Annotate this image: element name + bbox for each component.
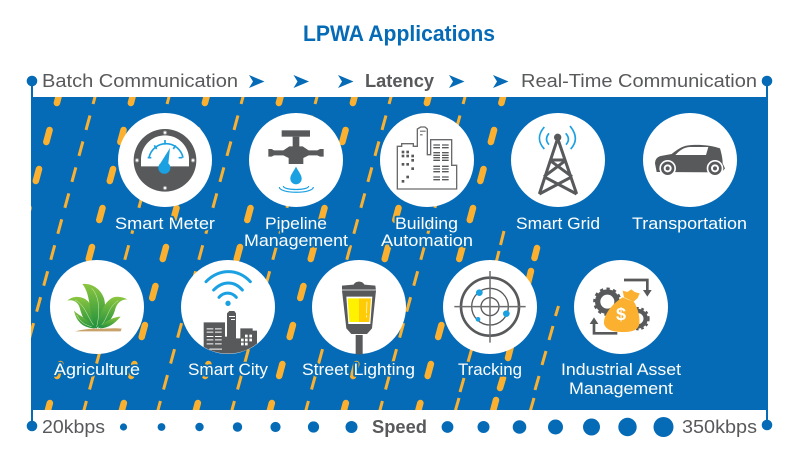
icon circle: transportation [643,113,737,207]
label: transportation: Transportation [632,215,747,233]
latency label: Latency [365,71,434,91]
label: building automation [381,215,473,250]
icon: wifi and city [204,272,257,357]
application: transportation [632,113,747,233]
label: industrial asset management: Management [569,380,673,398]
350kbps label: 350kbps [682,416,757,437]
label: pipeline management: Management [244,232,348,250]
label: smart grid: Smart Grid [516,215,600,233]
axis end dot [762,76,772,86]
application: building automation [380,113,474,250]
latency axis [27,70,772,91]
panel: applications background [31,97,768,410]
icon circle: tracking [443,260,537,354]
label: building automation: Building [395,215,458,233]
dashed rain pattern [31,97,560,410]
icon circle: smart meter [118,113,212,207]
arrows [249,75,508,88]
speed dots [120,417,673,437]
icon circle: pipeline [249,113,343,207]
icon: pipe and drop [268,130,324,192]
label: industrial asset management: Industrial Asset [561,361,681,379]
application: smart grid [511,113,605,233]
label: building automation: Automation [381,232,473,250]
icon: target [454,271,526,343]
application: smart city [181,260,275,379]
speed label: Speed [372,417,427,437]
real-time communication label: Real-Time Communication [521,70,757,91]
application: industrial asset management [561,260,681,398]
icon circle: agriculture [50,260,144,354]
axis start dot [27,421,37,431]
application: pipeline management [244,113,348,250]
icon: car [655,145,725,177]
application: smart meter [115,113,216,233]
label: pipeline management [244,215,348,250]
icon circle: smart grid [511,113,605,207]
icon: plant [67,284,127,331]
label: tracking: Tracking [458,361,522,379]
icon circle: smart city [181,260,275,354]
application: agriculture [50,260,144,379]
icon: tower [539,126,577,194]
batch communication label: Batch Communication [42,70,238,91]
icon circle: street lighting [312,260,406,354]
application: street lighting [302,260,415,379]
speed axis [27,416,772,437]
icon: gauge [134,129,196,192]
label: industrial asset management [561,361,681,398]
icon circle: building [380,113,474,207]
icon: building outline [397,127,457,189]
axis end dot [762,420,772,430]
label: smart city: Smart City [188,361,269,379]
icon: street lamp [341,282,376,354]
label: smart meter: Smart Meter [115,215,216,233]
icon circle: industrial asset [574,260,668,354]
application: tracking [443,260,537,379]
20kbps label: 20kbps [42,416,105,437]
label: pipeline management: Pipeline [265,215,327,233]
label: agriculture: Agriculture [54,361,140,379]
title: LPWA Applications [303,21,495,46]
icon: money bag and gears: $ [616,304,626,324]
axis start dot [27,76,37,86]
frame stems [31,81,768,426]
label: street lighting: Street Lighting [302,361,415,379]
